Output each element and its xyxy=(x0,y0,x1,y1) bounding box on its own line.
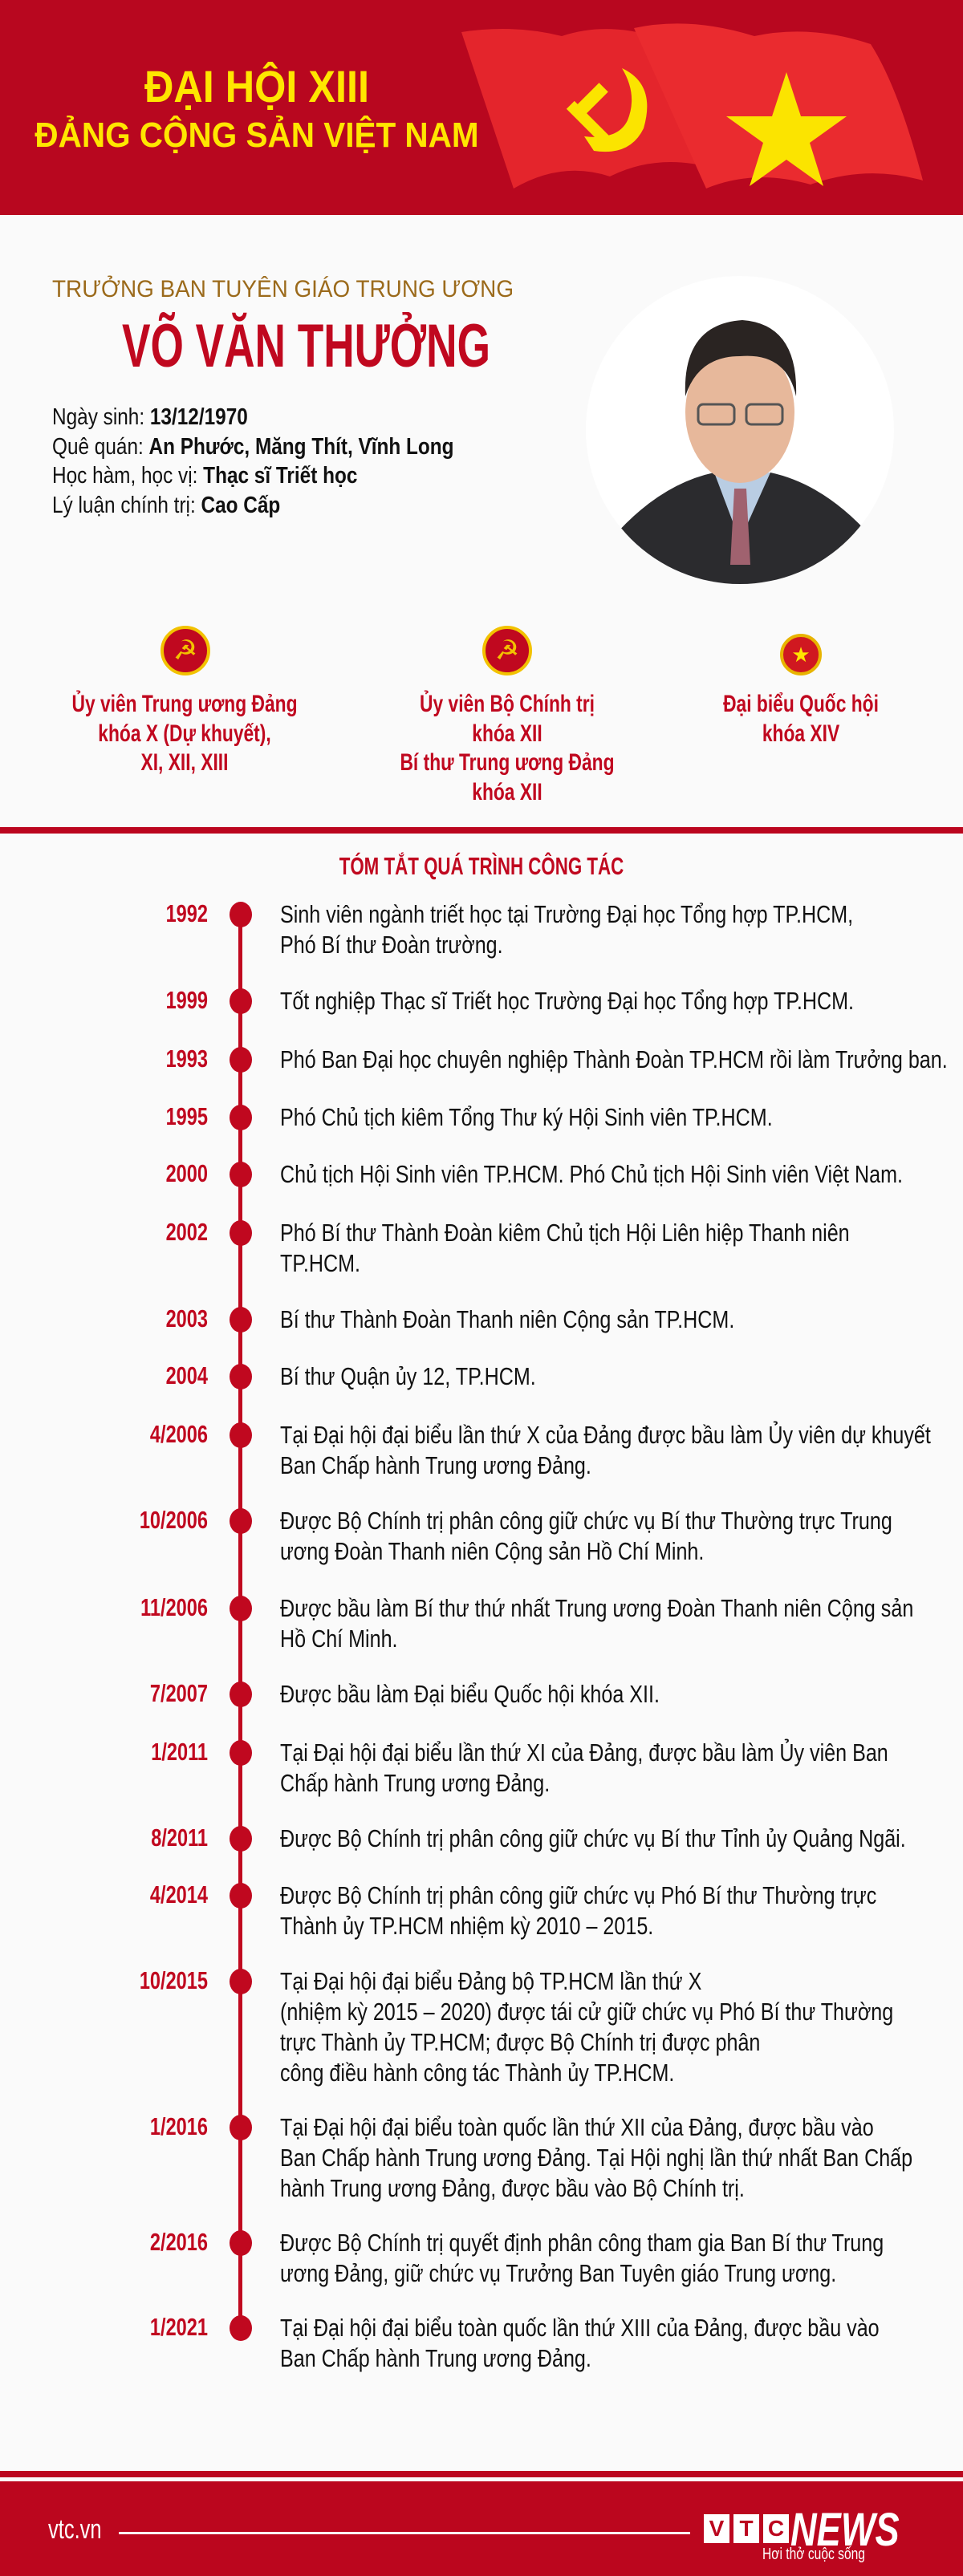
text: Bí thư Trung ương Đảng xyxy=(400,749,615,776)
timeline xyxy=(238,927,242,2315)
title: ĐẠI HỘI XIII xyxy=(144,61,369,112)
timeline heading: TÓM TẮT QUÁ TRÌNH CÔNG TÁC xyxy=(339,852,624,880)
timeline entries: Hồ Chí Minh. xyxy=(280,1625,398,1653)
icon: yellow star xyxy=(726,72,847,186)
logo: VTC NEWS: Hơi thở cuộc sống xyxy=(762,2546,865,2563)
timeline entries: Bí thư Quận ủy 12, TP.HCM. xyxy=(280,1362,536,1390)
timeline entries: công điều hành công tác Thành ủy TP.HCM. xyxy=(280,2059,674,2087)
personal info: Lý luận chính trị: Cao Cấp xyxy=(52,493,280,518)
footer xyxy=(0,2471,963,2576)
timeline entries: Thành ủy TP.HCM nhiệm kỳ 2010 – 2015. xyxy=(280,1912,653,1940)
text: khóa XII xyxy=(472,720,542,746)
timeline entries: Chấp hành Trung ương Đảng. xyxy=(280,1769,550,1797)
text: khóa XII xyxy=(472,778,542,805)
personal info: Ngày sinh: 13/12/1970 xyxy=(52,404,248,430)
logo: VTC NEWS: T xyxy=(739,2516,754,2541)
timeline entries: Phó Chủ tịch kiêm Tổng Thư ký Hội Sinh viên TP.HCM. xyxy=(280,1103,773,1131)
personal info: Quê quán: An Phước, Măng Thít, Vĩnh Long xyxy=(52,433,454,459)
name heading: VÕ VĂN THƯỞNG xyxy=(122,312,490,380)
icon: hammer and sickle xyxy=(567,68,647,152)
flags illustration xyxy=(461,23,923,189)
timeline entries: Ban Chấp hành Trung ương Đảng. xyxy=(280,1451,591,1479)
timeline entries: hành Trung ương Đảng, được bầu vào Bộ Chính trị. xyxy=(280,2174,745,2202)
role: central committee xyxy=(71,626,298,776)
timeline entries: 10/2006 xyxy=(140,1506,208,1534)
timeline entries: Phó Bí thư Thành Đoàn kiêm Chủ tịch Hội Liên hiệp Thanh niên xyxy=(280,1219,850,1247)
timeline entries: 2004 xyxy=(166,1361,208,1389)
timeline entries: Tại Đại hội đại biểu lần thứ XI của Đảng, được bầu làm Ủy viên Ban xyxy=(280,1738,888,1767)
timeline entries: trực Thành ủy TP.HCM; được Bộ Chính trị được phân xyxy=(280,2028,760,2056)
timeline entries: Được Bộ Chính trị phân công giữ chức vụ Phó Bí thư Thường trực xyxy=(280,1881,876,1909)
logo: VTC NEWS: C xyxy=(768,2516,784,2541)
timeline entries: 4/2006 xyxy=(150,1420,208,1448)
text: Đại biểu Quốc hội xyxy=(723,691,879,717)
timeline entries: Tại Đại hội đại biểu lần thứ X của Đảng được bầu làm Ủy viên dự khuyết xyxy=(280,1421,931,1449)
timeline entries: Tốt nghiệp Thạc sĩ Triết học Trường Đại học Tổng hợp TP.HCM. xyxy=(280,987,854,1015)
text: XI, XII, XIII xyxy=(141,749,228,776)
timeline entries: 4/2014 xyxy=(150,1880,208,1909)
timeline entries: 1/2016 xyxy=(150,2112,208,2140)
timeline entries: Được bầu làm Bí thư thứ nhất Trung ương Đoàn Thanh niên Cộng sản xyxy=(280,1594,913,1622)
timeline entries: 1/2021 xyxy=(150,2313,208,2341)
timeline entries: TP.HCM. xyxy=(280,1249,360,1277)
timeline entries: Được Bộ Chính trị phân công giữ chức vụ Bí thư Tỉnh ủy Quảng Ngãi. xyxy=(280,1824,906,1852)
timeline entries: Ban Chấp hành Trung ương Đảng. xyxy=(280,2344,591,2372)
timeline entries: Được Bộ Chính trị quyết định phân công tham gia Ban Bí thư Trung xyxy=(280,2229,884,2257)
text: khóa XIV xyxy=(762,720,839,746)
timeline entries: Bí thư Thành Đoàn Thanh niên Cộng sản TP.HCM. xyxy=(280,1305,734,1333)
icon: national emblem: ★ xyxy=(791,643,811,667)
role: national assembly xyxy=(723,634,879,746)
timeline entries: 1/2011 xyxy=(151,1738,208,1766)
logo: VTC NEWS: V xyxy=(709,2516,724,2541)
timeline entries: Tại Đại hội đại biểu Đảng bộ TP.HCM lần thứ X xyxy=(280,1967,701,1995)
role: politburo xyxy=(400,626,615,805)
timeline entries: Được bầu làm Đại biểu Quốc hội khóa XII. xyxy=(280,1680,660,1708)
timeline entries: 2002 xyxy=(166,1218,208,1246)
timeline entries: 1995 xyxy=(166,1102,208,1130)
timeline entries: Tại Đại hội đại biểu toàn quốc lần thứ XII của Đảng, được bầu vào xyxy=(280,2113,874,2141)
timeline entries: Tại Đại hội đại biểu toàn quốc lần thứ XIII của Đảng, được bầu vào xyxy=(280,2314,880,2342)
source: vtc.vn: vtc.vn xyxy=(48,2514,102,2545)
personal info: Học hàm, học vị: Thạc sĩ Triết học xyxy=(52,463,357,489)
timeline entries: Phó Ban Đại học chuyên nghiệp Thành Đoàn TP.HCM rồi làm Trưởng ban. xyxy=(280,1045,948,1073)
timeline entries: 7/2007 xyxy=(150,1679,208,1707)
timeline entries: 1999 xyxy=(166,986,208,1014)
timeline entries: ương Đảng, giữ chức vụ Trưởng Ban Tuyên giáo Trung ương. xyxy=(280,2259,836,2287)
timeline entries: 8/2011 xyxy=(151,1823,208,1852)
text: Ủy viên Bộ Chính trị xyxy=(420,691,595,717)
text: khóa X (Dự khuyết), xyxy=(98,720,271,746)
timeline entries: Chủ tịch Hội Sinh viên TP.HCM. Phó Chủ tịch Hội Sinh viên Việt Nam. xyxy=(280,1160,903,1188)
timeline entries: (nhiệm kỳ 2015 – 2020) được tái cử giữ chức vụ Phó Bí thư Thường xyxy=(280,1998,893,2026)
timeline entries: Được Bộ Chính trị phân công giữ chức vụ Bí thư Thường trực Trung xyxy=(280,1507,892,1535)
header banner xyxy=(0,0,963,215)
timeline entries: 2/2016 xyxy=(150,2228,208,2256)
logo: VTC NEWS: NEWS xyxy=(790,2504,900,2556)
timeline entries: 10/2015 xyxy=(140,1966,208,1994)
icon: party emblem xyxy=(482,626,532,675)
timeline entries: 1992 xyxy=(166,899,208,927)
personal info xyxy=(52,404,454,518)
icon: party emblem: ☭ xyxy=(173,635,197,666)
icon: party emblem xyxy=(160,626,210,675)
timeline entries: 1993 xyxy=(166,1045,208,1073)
text: Ủy viên Trung ương Đảng xyxy=(71,691,298,717)
logo: VTC NEWS xyxy=(704,2504,900,2563)
icon: party emblem: ☭ xyxy=(495,635,519,666)
timeline entries: 11/2006 xyxy=(140,1593,208,1621)
timeline entries: Ban Chấp hành Trung ương Đảng. Tại Hội nghị lần thứ nhất Ban Chấp xyxy=(280,2144,912,2172)
timeline entries: ương Đoàn Thanh niên Cộng sản Hồ Chí Minh. xyxy=(280,1537,704,1565)
red divider xyxy=(0,827,963,834)
timeline entries: Sinh viên ngành triết học tại Trường Đại học Tổng hợp TP.HCM, xyxy=(280,900,853,928)
timeline entries: Phó Bí thư Đoàn trường. xyxy=(280,931,503,959)
title: ĐẢNG CỘNG SẢN VIỆT NAM xyxy=(35,116,479,155)
timeline entries: 2003 xyxy=(166,1304,208,1333)
subtitle: TRƯỞNG BAN TUYÊN GIÁO TRUNG ƯƠNG xyxy=(52,276,514,302)
icon: national emblem xyxy=(780,634,822,675)
timeline entries: 2000 xyxy=(166,1159,208,1187)
portrait photo xyxy=(621,320,860,584)
title xyxy=(35,61,479,155)
